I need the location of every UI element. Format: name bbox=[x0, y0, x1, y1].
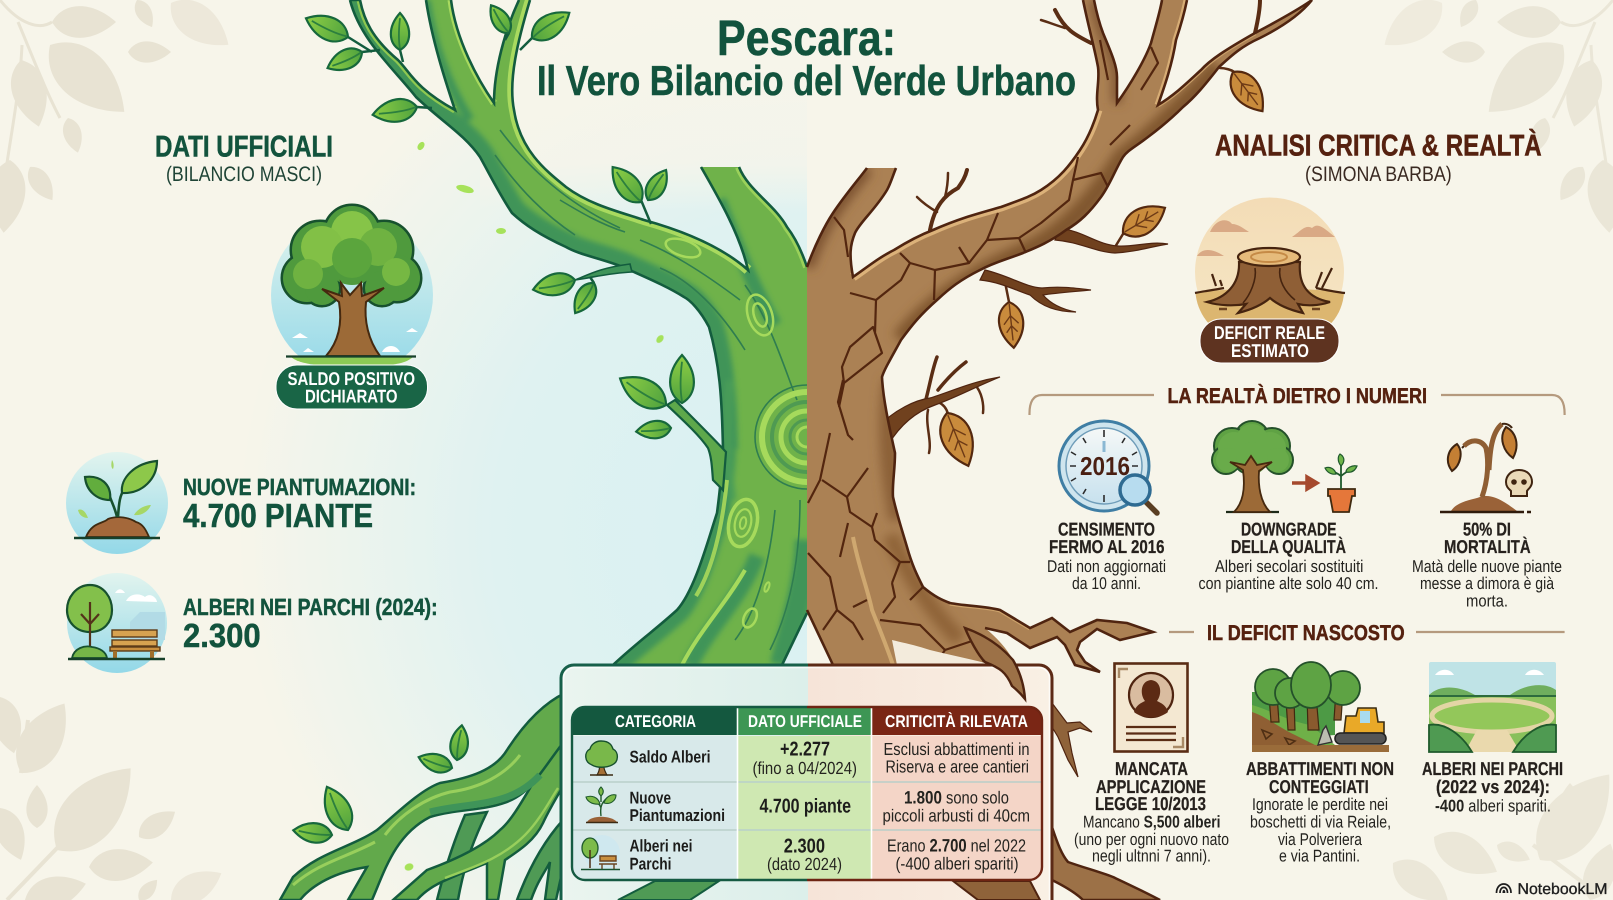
text: alberi nei parchi confronto: -400 alberi spariti. bbox=[1435, 796, 1551, 816]
lower roots seen beneath the table bbox=[618, 881, 1040, 900]
text: abbattimenti: Ignorate le perdite nei bbox=[1252, 795, 1388, 814]
row: saldo alberi: Saldo Alberi bbox=[630, 748, 710, 766]
gap between roots bbox=[892, 640, 993, 665]
trunk knots and rings bbox=[664, 237, 807, 629]
icon: park tree and bench bbox=[67, 573, 167, 673]
text: downgrade della qualita: DELLA QUALITÀ bbox=[1231, 536, 1346, 557]
row: nuove piantumazioni: 1.800 sono solo bbox=[904, 787, 1009, 807]
green leaves bbox=[292, 1, 694, 845]
title: Pescara: bbox=[717, 10, 896, 66]
row: alberi nei parchi: (dato 2024) bbox=[767, 854, 842, 874]
section heading: la realta dietro i numeri bbox=[1029, 383, 1565, 415]
text: alberi nei parchi confronto: ALBERI NEI PARCHI bbox=[1422, 758, 1563, 779]
row: saldo alberi: Esclusi abbattimenti in bbox=[884, 739, 1030, 759]
canopy bbox=[283, 206, 420, 305]
text: mortalita: messe a dimora è già bbox=[1420, 574, 1554, 593]
table header: CRITICITÀ RILEVATA bbox=[885, 711, 1028, 731]
row: saldo alberi bbox=[586, 738, 1030, 778]
text: downgrade della qualita: DOWNGRADE bbox=[1241, 519, 1337, 540]
trunk bbox=[322, 283, 384, 356]
row: alberi nei parchi: Alberi nei bbox=[630, 836, 692, 856]
icon: tree small bbox=[586, 741, 617, 775]
bulldozer bbox=[1318, 708, 1386, 745]
title bbox=[537, 10, 1076, 104]
pill: deficit reale estimato bbox=[1200, 319, 1339, 363]
icon: dead plant and skull bbox=[1440, 424, 1532, 512]
heading: dati ufficiali: DATI UFFICIALI bbox=[155, 130, 333, 164]
icon: new plantings sprout bbox=[66, 452, 168, 554]
text: downgrade della qualita bbox=[1198, 519, 1378, 593]
text: abbattimenti: e via Pantini. bbox=[1279, 847, 1360, 866]
text: mancata applicazione: Mancano S,500 alberi bbox=[1083, 813, 1220, 832]
text: censimento fermo bbox=[1047, 519, 1166, 593]
text: abbattimenti: CONTEGGIATI bbox=[1269, 776, 1369, 797]
sky glow behind green half bbox=[200, 0, 807, 900]
text: mancata applicazione: (uno per ogni nuovo nato bbox=[1074, 830, 1229, 849]
row: saldo alberi: Riserva e aree cantieri bbox=[886, 756, 1029, 776]
stat: alberi nei parchi bbox=[183, 594, 438, 655]
brown leaves bbox=[933, 64, 1273, 471]
row: alberi nei parchi: (-400 alberi spariti) bbox=[896, 853, 1018, 873]
leaf stems bbox=[348, 33, 651, 283]
heading: dati ufficiali bbox=[155, 130, 333, 186]
icon: positive balance tree bbox=[271, 206, 433, 376]
stat: nuove piantumazioni bbox=[183, 474, 416, 535]
green trunk and branches bbox=[350, 0, 807, 665]
root overlapping card corner bbox=[965, 628, 1025, 699]
text: mancata applicazione: negli ultnni 7 anni). bbox=[1092, 847, 1211, 866]
text: mortalita: MORTALITÀ bbox=[1444, 536, 1531, 557]
text: mortalita: 50% DI bbox=[1463, 519, 1511, 540]
bark cracks bbox=[808, 40, 1158, 665]
icon: bulldozer felling woods bbox=[1252, 662, 1389, 752]
text: mortalita: Matà delle nuove piante bbox=[1412, 557, 1562, 576]
dead twigs bbox=[917, 0, 1260, 453]
text: abbattimenti bbox=[1246, 758, 1394, 866]
row: nuove piantumazioni: Piantumazioni bbox=[630, 806, 725, 825]
stat: nuove piantumazioni: NUOVE PIANTUMAZIONI: bbox=[183, 474, 416, 500]
stat: alberi nei parchi: ALBERI NEI PARCHI (2024): bbox=[183, 594, 438, 620]
row: nuove piantumazioni: piccoli arbusti di 40cm bbox=[882, 806, 1030, 826]
table header: CATEGORIA bbox=[615, 712, 696, 731]
side twig holding two leaves bbox=[575, 264, 632, 280]
green roots bbox=[280, 693, 565, 900]
text: mortalita: morta. bbox=[1466, 592, 1508, 610]
row: saldo alberi: (fino a 04/2024) bbox=[752, 758, 857, 778]
icon: clock census 2016: 2016 bbox=[1080, 451, 1130, 481]
decorative leaves top right bbox=[1374, 0, 1613, 234]
tapered side branches bbox=[880, 228, 1168, 777]
row: nuove piantumazioni: 4.700 piante bbox=[760, 796, 851, 818]
text: mancata applicazione: LEGGE 10/2013 bbox=[1095, 793, 1206, 814]
section heading: la realta dietro i numeri: LA REALTÀ DIETRO I NUMERI bbox=[1168, 383, 1427, 408]
card inner highlight bbox=[564, 668, 1050, 900]
row: alberi nei parchi: Parchi bbox=[630, 854, 672, 873]
decorative leaves bottom right bbox=[1384, 757, 1613, 900]
table header: DATO UFFICIALE bbox=[748, 712, 862, 731]
brown dead tree, right half bbox=[807, 0, 1312, 900]
NotebookLM watermark: NotebookLM bbox=[1518, 881, 1608, 898]
text: abbattimenti: boschetti di via Reiale, bbox=[1250, 813, 1391, 832]
heading: analisi critica bbox=[1215, 128, 1542, 186]
text: censimento fermo: CENSIMENTO bbox=[1058, 519, 1155, 540]
brown lower roots bbox=[1052, 827, 1160, 900]
icon: birth certificate document bbox=[1114, 664, 1188, 752]
decorative leaves bottom left bbox=[0, 693, 228, 900]
heading: analisi critica: (SIMONA BARBA) bbox=[1305, 163, 1452, 186]
icon: park lawn view bbox=[1429, 662, 1556, 752]
heading: analisi critica: ANALISI CRITICA & REALTÀ bbox=[1215, 128, 1542, 162]
pale fade at top of sky bbox=[480, 0, 820, 210]
icon: sprout small bbox=[586, 787, 618, 822]
icon: park small bbox=[581, 835, 620, 871]
pill: deficit reale estimato: ESTIMATO bbox=[1231, 340, 1309, 361]
green living tree, left half bbox=[280, 0, 859, 900]
text: mancata applicazione: MANCATA bbox=[1115, 758, 1188, 779]
stat: nuove piantumazioni: 4.700 PIANTE bbox=[183, 498, 373, 535]
text: censimento fermo: da 10 anni. bbox=[1072, 574, 1141, 593]
pill: deficit reale estimato: DEFICIT REALE bbox=[1214, 322, 1325, 343]
floating green specks bbox=[404, 141, 665, 872]
brown trunk and branches bbox=[807, 0, 1312, 672]
row: nuove piantumazioni bbox=[586, 787, 1030, 826]
text: alberi nei parchi confronto bbox=[1422, 758, 1563, 816]
icon: big tree to small potted plant bbox=[1212, 421, 1357, 512]
table header bbox=[615, 711, 1028, 731]
row: alberi nei parchi bbox=[581, 835, 1026, 874]
text: mancata applicazione: APPLICAZIONE bbox=[1096, 776, 1206, 797]
small side branch bbox=[667, 400, 726, 490]
pill: saldo positivo dichiarato bbox=[276, 365, 428, 409]
heading: dati ufficiali: (BILANCIO MASCI) bbox=[166, 163, 322, 186]
text: alberi nei parchi confronto: (2022 vs 2024): bbox=[1436, 776, 1550, 797]
row: saldo alberi: +2.277 bbox=[780, 738, 830, 760]
icon: clock census 2016 bbox=[1059, 421, 1157, 513]
comparison card background bbox=[561, 665, 1052, 900]
text: abbattimenti: ABBATTIMENTI NON bbox=[1246, 758, 1394, 779]
comparison table bbox=[572, 707, 1042, 881]
decorative leaves top left bbox=[0, 0, 239, 234]
text: mancata applicazione bbox=[1074, 758, 1229, 866]
title: Il Vero Bilancio del Verde Urbano bbox=[537, 57, 1076, 104]
text: censimento fermo: FERMO AL 2016 bbox=[1049, 536, 1164, 557]
icon: tree stump bbox=[1195, 198, 1345, 346]
text: censimento fermo: Dati non aggiornati bbox=[1047, 557, 1166, 576]
row: alberi nei parchi: Erano 2.700 nel 2022 bbox=[887, 836, 1026, 856]
text: downgrade della qualita: con piantine alte solo 40 cm. bbox=[1198, 574, 1378, 593]
text: abbattimenti: via Polveriera bbox=[1278, 830, 1362, 849]
text: downgrade della qualita: Alberi secolari sostituiti bbox=[1215, 557, 1363, 576]
pill: saldo positivo dichiarato: DICHIARATO bbox=[305, 386, 398, 407]
text: mortalita bbox=[1412, 519, 1562, 610]
row: alberi nei parchi: 2.300 bbox=[784, 835, 825, 857]
section heading: il deficit nascosto: IL DEFICIT NASCOSTO bbox=[1207, 621, 1405, 645]
arrow bbox=[1292, 477, 1317, 489]
stat: alberi nei parchi: 2.300 bbox=[183, 618, 261, 655]
row: nuove piantumazioni: Nuove bbox=[630, 788, 671, 807]
pill: saldo positivo dichiarato: SALDO POSITIVO bbox=[288, 368, 415, 389]
